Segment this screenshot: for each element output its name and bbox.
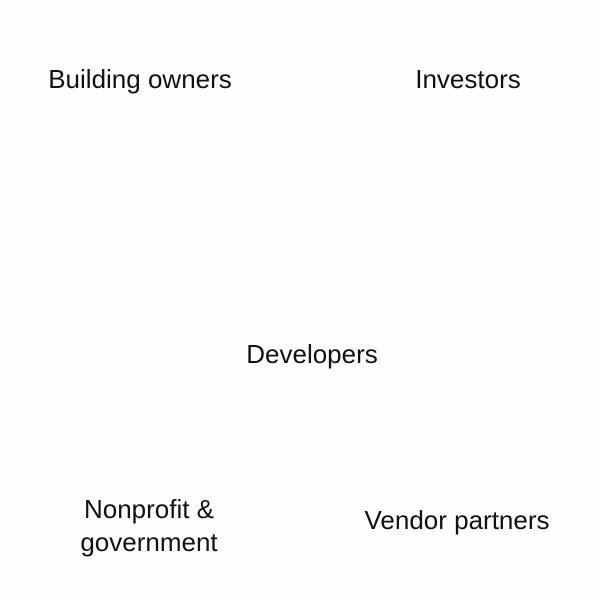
label: vendor partners: Vendor partners <box>364 505 550 535</box>
label: nonprofit & government: government <box>80 527 218 557</box>
label: nonprofit & government <box>80 494 218 557</box>
label: nonprofit & government: Nonprofit & <box>84 494 214 524</box>
label: building owners: Building owners <box>48 64 232 94</box>
label: developers: Developers <box>246 339 378 369</box>
label: investors: Investors <box>415 64 521 94</box>
